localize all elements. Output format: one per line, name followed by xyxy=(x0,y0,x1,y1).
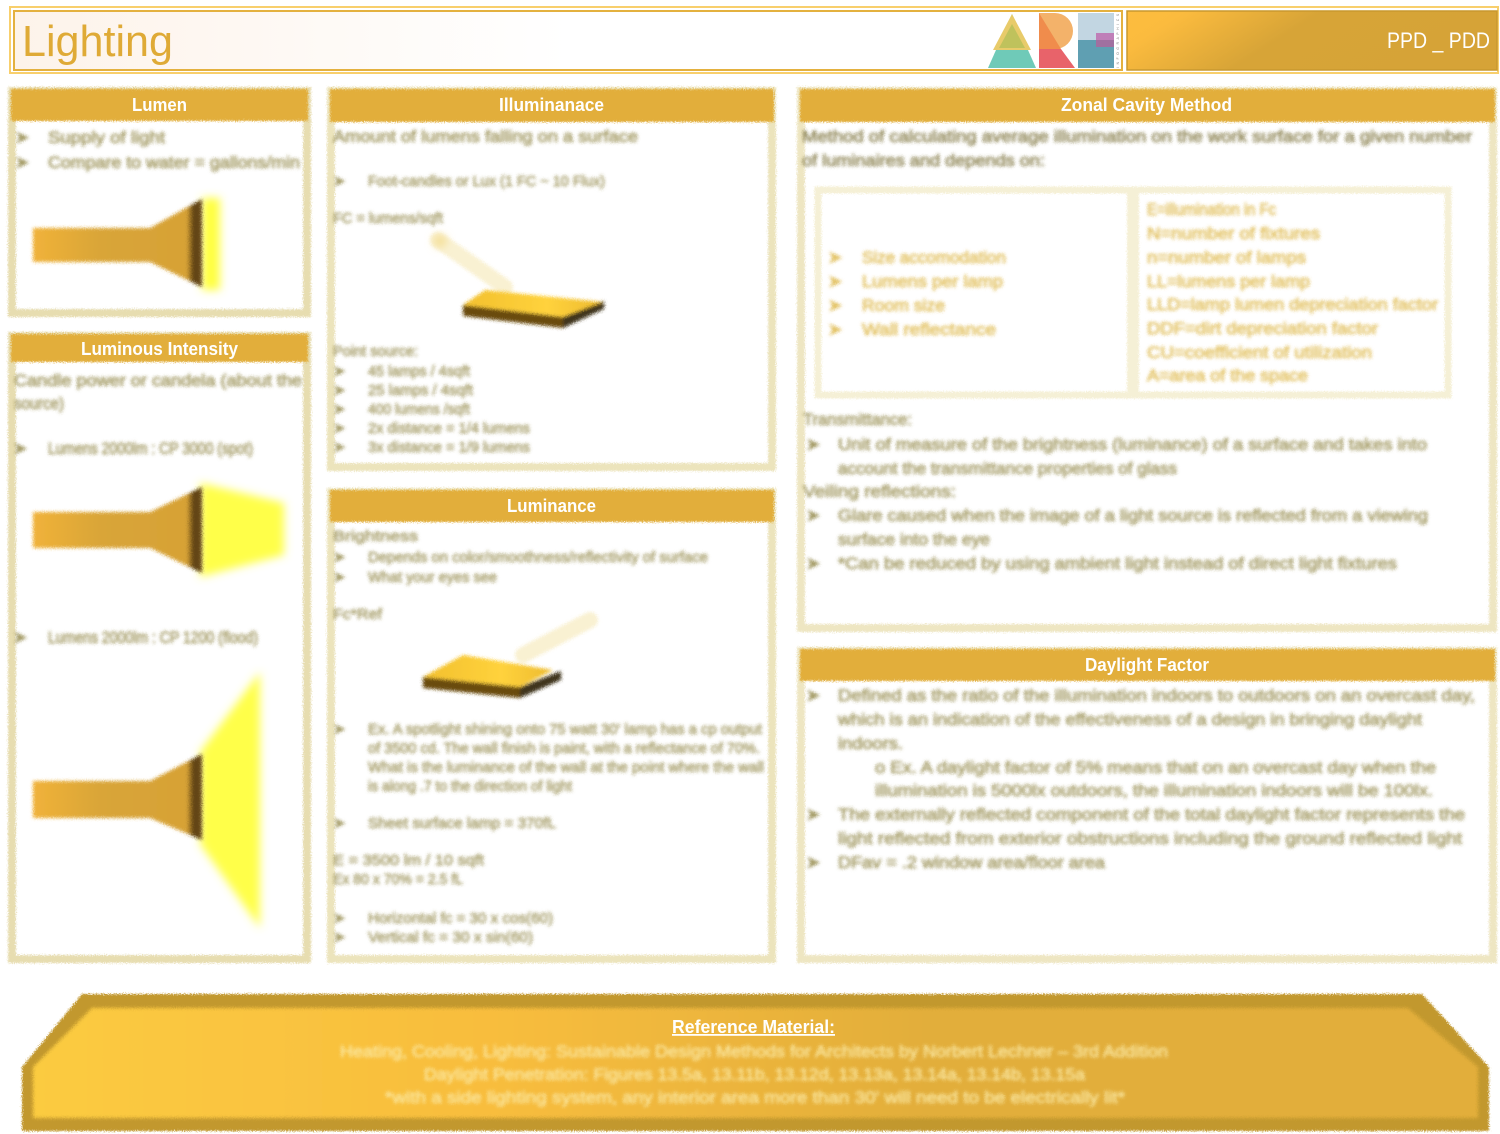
text: point source list: ➤ xyxy=(333,363,346,380)
text: point source list: ➤ xyxy=(333,382,346,399)
text: Transmittance and Veiling reflections xyxy=(803,410,1428,573)
text: Luminous Intensity description: Lumens 2000lm : CP 3000 (spot) xyxy=(48,439,253,458)
text: Illuminance definition: Amount of lumens falling on a surface xyxy=(333,127,638,146)
text: Luminance example: ➤ xyxy=(333,815,346,832)
text: factors list: Wall reflectance xyxy=(862,320,996,339)
text: Luminous Intensity description: ➤ xyxy=(13,439,27,458)
text: Luminance example xyxy=(333,721,764,946)
text: Luminous Intensity description: Lumens 2000lm : CP 1200 (flood) xyxy=(48,628,258,647)
text: factors list: Room size xyxy=(862,296,945,315)
text: references: *with a side lighting system, any interior area more than 30' will need to be electrically lit* xyxy=(385,1088,1125,1107)
text: Daylight Factor notes: o Ex. A daylight factor of 5% means that on an overcast day when the xyxy=(875,758,1436,777)
text: Daylight Factor notes xyxy=(806,686,1475,872)
text: point source list: ➤ xyxy=(333,420,346,437)
text: Daylight Factor notes: Defined as the ratio of the illumination indoors to outdoors on an overcast day, xyxy=(838,686,1475,705)
text: Luminance example: ➤ xyxy=(333,929,346,946)
text: Luminance intro: What your eyes see xyxy=(368,569,497,586)
text: Daylight Factor notes: DFav = .2 window area/floor area xyxy=(838,853,1106,872)
text: Luminance intro: Brightness xyxy=(333,528,418,545)
heading: Reference Material: Reference Material: xyxy=(672,1017,835,1037)
text: Zonal Cavity definition: Method of calculating average illumination on the work surface for a given number xyxy=(802,127,1472,146)
text: Lumen bullets: Supply of light xyxy=(48,128,165,147)
text: point source list: 25 lamps / 4sqft xyxy=(368,382,474,399)
text: Luminance example: Horizontal fc = 30 x cos(60) xyxy=(368,910,553,927)
heading: Lumen: Lumen xyxy=(132,95,187,115)
text: Daylight Factor notes: The externally reflected component of the total daylight factor represents the xyxy=(838,805,1465,824)
text: Luminance example: What is the luminance of the wall at the point where the wall xyxy=(368,759,764,776)
text: Luminance example: Vertical fc = 30 x sin(60) xyxy=(368,929,533,946)
text: point source list: 45 lamps / 4sqft xyxy=(368,363,471,380)
banner: PPD _ PDD xyxy=(1127,11,1497,70)
text: point source list: ➤ xyxy=(333,401,346,418)
panel: Zonal Cavity Method xyxy=(800,89,1495,628)
text: Luminance example: ➤ xyxy=(333,910,346,927)
text: formula terms: LL=lumens per lamp xyxy=(1147,272,1310,291)
icon: flashlight with small beam xyxy=(33,198,220,290)
text: point source list: 2x distance = 1/4 lumens xyxy=(368,420,530,437)
text: Transmittance and Veiling reflections: surface into the eye xyxy=(838,530,990,549)
text: Daylight Factor notes: ➤ xyxy=(806,853,820,872)
text: Daylight Factor notes: illumination is 5000lx outdoors, the illumination indoors will be 100lx. xyxy=(875,781,1433,800)
text: formula terms: E=illumination in Fc xyxy=(1147,200,1276,219)
text: Illuminance definition: ➤ xyxy=(333,173,346,190)
text: Luminance example: E = 3500 lm / 10 sqft xyxy=(333,852,485,869)
text: Transmittance and Veiling reflections: *Can be reduced by using ambient light instead of direct light fixtures xyxy=(838,554,1397,573)
panel: Illuminanace xyxy=(330,89,774,467)
panel: Daylight Factor xyxy=(800,649,1495,959)
heading: Luminous Intensity: Luminous Intensity xyxy=(81,339,238,359)
icon: flashlight with wide beam xyxy=(33,672,260,928)
text: Luminance intro: Fc*Ref xyxy=(333,606,383,623)
panel: Luminance xyxy=(330,490,774,959)
heading: Daylight Factor: Daylight Factor xyxy=(1085,655,1209,675)
text: Transmittance and Veiling reflections: Glare caused when the image of a light source is reflected from a viewing xyxy=(838,506,1428,525)
text: Transmittance and Veiling reflections: Transmittance: xyxy=(803,410,912,429)
text: Luminance intro: ➤ xyxy=(333,549,346,566)
heading: Luminance: Luminance xyxy=(507,496,596,516)
text: references: Heating, Cooling, Lighting: Sustainable Design Methods for Architects by Norbert Lechner – 3rd Addition xyxy=(340,1042,1168,1061)
icon: light ray reflecting from surface xyxy=(423,620,590,698)
text: factors list: ➤ xyxy=(828,248,842,267)
panel: Reference Material xyxy=(22,994,1489,1131)
text: Daylight Factor notes: light reflected from exterior obstructions including the ground reflected light xyxy=(838,829,1462,848)
icon: ARE logo: INFOGRAPHICS xyxy=(1116,14,1120,68)
text: Luminance example: Ex. A spotlight shining onto 75 watt 30' lamp has a cp output xyxy=(368,721,763,738)
text: Luminous Intensity description: Candle power or candela (about the xyxy=(14,371,302,390)
text: factors list: ➤ xyxy=(828,272,842,291)
text: factors list: Lumens per lamp xyxy=(862,272,1003,291)
text: formula terms: N=number of fixtures xyxy=(1147,224,1320,243)
text: formula terms: n=number of lamps xyxy=(1147,248,1306,267)
title bar xyxy=(10,7,1498,73)
text: references: Daylight Penetration: Figures 13.5a, 13.11b, 13.12d, 13.13a, 13.14a, 13.14b, 13.15a xyxy=(424,1065,1086,1084)
text: Luminous Intensity description: source) xyxy=(14,394,64,413)
text: Transmittance and Veiling reflections: account the transmittance properties of glass xyxy=(838,459,1177,478)
text: factors list: ➤ xyxy=(828,296,842,315)
text: Illuminance definition: FC = lumens/sqft xyxy=(333,210,444,227)
text: Lumen bullets xyxy=(15,128,300,172)
text: Luminance example: of 3500 cd. The wall finish is paint, with a reflectance of 70%. xyxy=(368,740,760,757)
text: factors list: ➤ xyxy=(828,320,842,339)
text: point source list xyxy=(333,343,530,456)
text: formula terms: LLD=lamp lumen depreciation factor xyxy=(1147,295,1438,314)
text: Luminance intro: Depends on color/smoothness/reflectivity of surface xyxy=(368,549,708,566)
icon: ARE logo xyxy=(988,13,1120,68)
text: Luminance example: Ex 80 x 70% = 2.5 fL xyxy=(333,871,463,888)
text: point source list: 400 lumens /sqft xyxy=(368,401,471,418)
text: Lumen bullets: ➤ xyxy=(15,128,29,147)
text: Daylight Factor notes: which is an indication of the effectiveness of a design in bringing daylight xyxy=(837,710,1422,729)
text: Transmittance and Veiling reflections: Veiling reflections: xyxy=(803,482,956,501)
panel: Luminous Intensity xyxy=(11,334,308,959)
text: Daylight Factor notes: indoors. xyxy=(838,734,903,753)
text: Luminance example: ➤ xyxy=(333,721,346,738)
icon: flashlight with narrow beam xyxy=(33,483,284,577)
text: Transmittance and Veiling reflections: ➤ xyxy=(806,435,820,454)
text: Luminous Intensity description xyxy=(13,371,302,647)
text: Lumen bullets: Compare to water = gallons/min xyxy=(48,153,300,172)
text: factors list xyxy=(828,248,1006,339)
text: Transmittance and Veiling reflections: ➤ xyxy=(806,506,820,525)
heading: Lighting: Lighting xyxy=(22,17,173,66)
text: factors list: Size accomodation xyxy=(862,248,1006,267)
text: Luminous Intensity description: ➤ xyxy=(13,628,27,647)
panel: Lumen xyxy=(11,89,308,313)
text: Luminance example: is along .7 to the direction of light xyxy=(368,778,573,795)
text: formula terms: DDF=dirt depreciation factor xyxy=(1147,319,1378,338)
text: Zonal Cavity definition: of luminaires and depends on: xyxy=(802,151,1045,170)
text: point source list: 3x distance = 1/9 lumens xyxy=(368,439,530,456)
text: references xyxy=(340,1042,1168,1107)
text: formula terms: A=area of the space xyxy=(1147,366,1308,385)
text: formula terms: CU=coefficient of utilization xyxy=(1147,343,1372,362)
text: formula terms xyxy=(1147,200,1438,385)
text: Daylight Factor notes: ➤ xyxy=(806,805,820,824)
text: Illuminance definition xyxy=(333,127,638,227)
text: Illuminance definition: Foot-candles or Lux (1 FC ~ 10 Flux) xyxy=(368,173,605,190)
text: Luminance intro: ➤ xyxy=(333,569,346,586)
text: Daylight Factor notes: ➤ xyxy=(806,686,820,705)
text: Transmittance and Veiling reflections: Unit of measure of the brightness (luminance) of a surface and takes into xyxy=(838,435,1427,454)
text: point source list: ➤ xyxy=(333,439,346,456)
heading: Illuminanace: Illuminanace xyxy=(499,95,604,115)
text: point source list: Point source: xyxy=(333,343,418,360)
text: Lumen bullets: ➤ xyxy=(15,153,29,172)
table: factors and formula terms xyxy=(818,190,1448,395)
text: Zonal Cavity definition xyxy=(802,127,1472,170)
heading: Zonal Cavity Method: Zonal Cavity Method xyxy=(1061,95,1232,115)
text: Luminance intro xyxy=(333,528,708,623)
banner: PPD _ PDD: PPD _ PDD xyxy=(1387,28,1490,53)
icon: light ray hitting surface xyxy=(434,235,604,328)
text: Luminance example: Sheet surface lamp = 370fL xyxy=(368,815,556,832)
text: Transmittance and Veiling reflections: ➤ xyxy=(806,554,820,573)
